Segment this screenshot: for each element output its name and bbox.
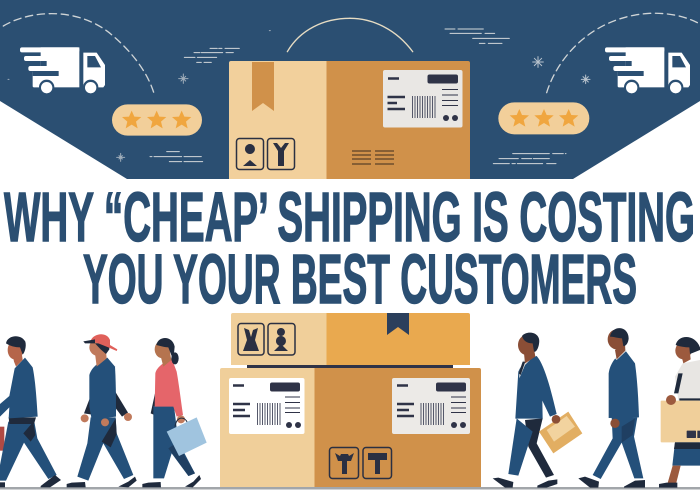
- icon: delivery truck right: [605, 47, 690, 95]
- shipping label: [383, 70, 462, 128]
- upper box: [231, 313, 470, 365]
- person 6: [659, 337, 700, 488]
- stacked boxes: [220, 313, 481, 487]
- shelf: [247, 365, 453, 368]
- person 4: [493, 333, 582, 488]
- top parcel box: [229, 61, 470, 179]
- people walking left group: [0, 334, 207, 487]
- left label: [229, 378, 304, 434]
- header banner background: [0, 0, 700, 179]
- person 2: [67, 334, 137, 487]
- person 5: [578, 328, 645, 488]
- right decorations: [350, 13, 700, 164]
- ground line: [0, 487, 700, 490]
- person 3: [142, 338, 207, 487]
- icon: delivery truck left: [20, 47, 105, 95]
- rating pill left: [112, 104, 202, 136]
- right label: [392, 378, 470, 434]
- people walking right group: [493, 328, 700, 488]
- stripes: [352, 151, 394, 164]
- handling icons: [236, 138, 294, 170]
- lower box: [220, 368, 481, 487]
- tape ribbon: [252, 62, 274, 111]
- left decorations: [3, 14, 350, 162]
- person 1: [0, 336, 61, 487]
- rating pill right: [498, 102, 589, 134]
- title: [4, 178, 695, 318]
